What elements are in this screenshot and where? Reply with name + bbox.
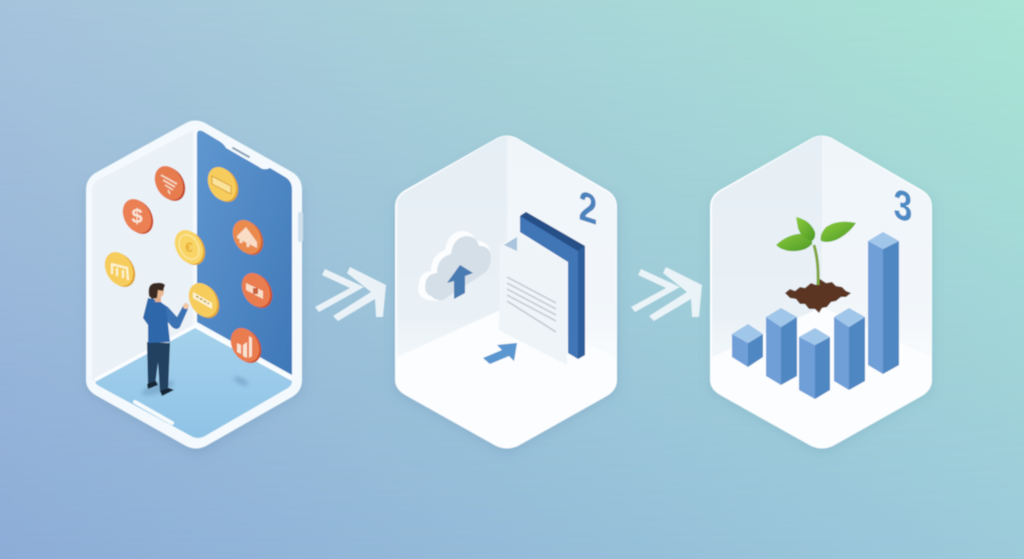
bar 4 xyxy=(834,308,865,390)
coin: dollar xyxy=(117,194,159,239)
person shadow xyxy=(140,377,176,399)
coin: house xyxy=(227,215,269,260)
coin: chart xyxy=(225,323,267,368)
coin: funnel xyxy=(149,161,191,206)
coin: card xyxy=(202,162,244,207)
stem xyxy=(814,245,818,285)
left leaf xyxy=(776,234,812,251)
panel 3 left wall xyxy=(712,136,822,357)
coin: box xyxy=(236,268,278,313)
panel 3: bars and sprout xyxy=(710,136,932,455)
bar 1 xyxy=(732,324,763,367)
person head and hair xyxy=(150,284,164,298)
panel 2: cloud upload and document xyxy=(395,136,617,455)
person jacket xyxy=(143,298,170,343)
panel 1: phone room with coins and person xyxy=(86,120,303,456)
person neck xyxy=(155,295,161,302)
arrow 1: double chevron xyxy=(315,267,386,321)
right leaf xyxy=(821,222,856,242)
panel 2 floor and frame xyxy=(395,136,617,448)
panel 1 left wall xyxy=(92,130,193,381)
panel 1 blue screen wall with notch xyxy=(197,131,292,375)
person arm and hand xyxy=(161,304,188,329)
panel 1 phone frame xyxy=(86,120,302,448)
top leaf xyxy=(796,217,815,241)
panel 2 drop shadow xyxy=(395,142,617,455)
panel 1 side button xyxy=(298,212,303,242)
coin: euro xyxy=(169,225,211,270)
person legs xyxy=(147,342,170,392)
panel 1 speaker slit xyxy=(233,148,249,157)
coin: euro: € xyxy=(185,239,193,255)
panel 2 cloud icon xyxy=(418,231,491,301)
coin: dollar: $ xyxy=(131,206,143,228)
panel 3 drop shadow xyxy=(710,142,932,455)
bar 2 xyxy=(766,308,797,385)
coin: ticket xyxy=(183,278,225,323)
panel 1 floating shadow xyxy=(233,375,249,387)
cloud upload arrow xyxy=(447,265,473,299)
panel 2 book xyxy=(520,212,585,359)
panel 2 document xyxy=(499,237,568,365)
panel 1 wall-floor edge xyxy=(95,326,292,380)
panel 2 left wall xyxy=(397,136,507,357)
coin: building xyxy=(99,247,141,292)
panel 2 step number: 2 xyxy=(579,182,597,235)
panel 1 drop shadow xyxy=(87,127,302,456)
panel 1 home indicator xyxy=(135,402,172,423)
document text lines xyxy=(507,277,556,332)
soil xyxy=(785,279,851,313)
bar 5 xyxy=(868,232,899,374)
panel 2 right wall xyxy=(507,136,616,357)
person xyxy=(140,283,189,399)
panel 1 floor xyxy=(95,328,292,438)
panel 3 step number: 3 xyxy=(894,181,912,232)
sprout xyxy=(776,217,856,313)
bar 3 xyxy=(799,328,830,399)
panel 3 right wall xyxy=(822,136,931,357)
person shoes xyxy=(147,381,174,396)
panel 3 floor and frame xyxy=(710,136,932,448)
panel 2 floor arrow xyxy=(483,343,517,364)
arrow 2: double chevron xyxy=(631,267,702,321)
